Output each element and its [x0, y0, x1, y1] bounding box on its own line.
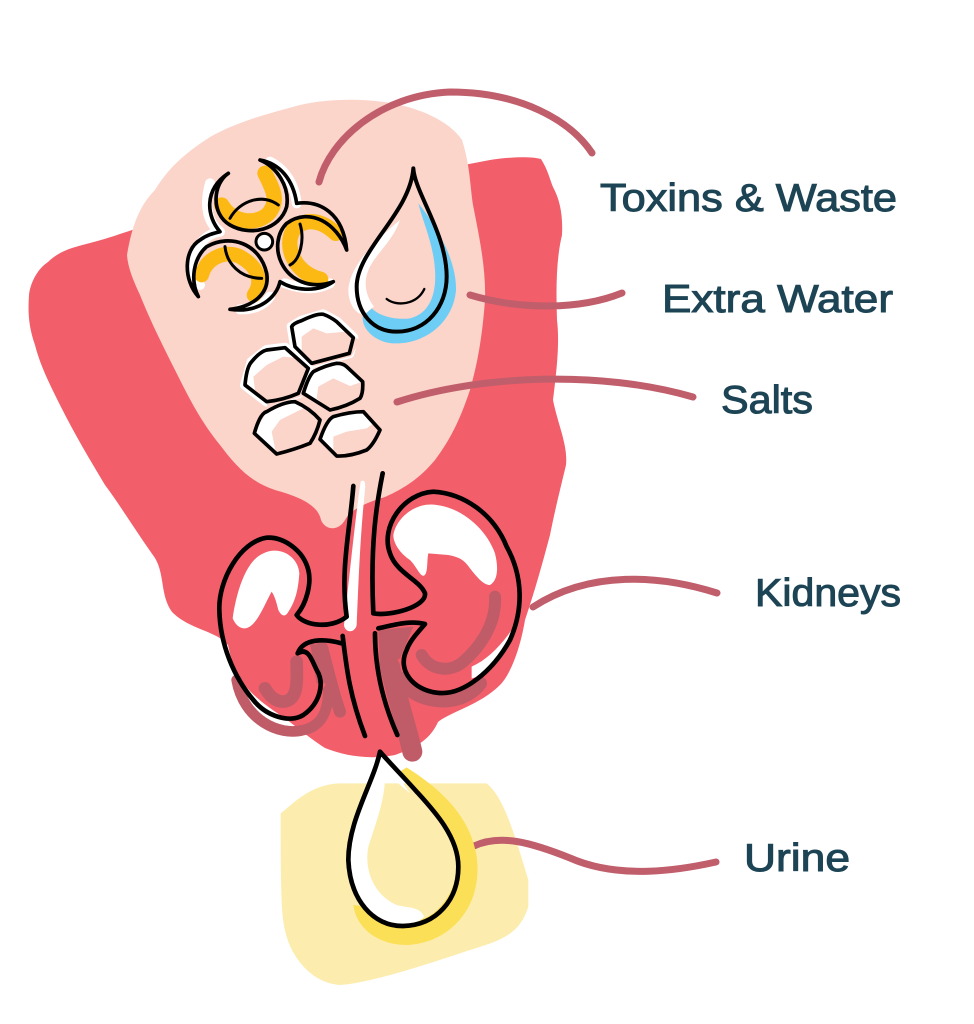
connector line: kidneys	[533, 579, 717, 607]
label: extra water: Extra Water	[662, 278, 893, 321]
peach stomach-like area	[127, 100, 485, 528]
icon: water drop	[348, 168, 456, 343]
label: urine: Urine	[744, 837, 850, 880]
red background blob	[29, 157, 566, 757]
icon: salt crystals	[245, 314, 380, 456]
urine pale yellow patch	[281, 783, 528, 985]
label: toxins and waste: Toxins & Waste	[600, 177, 897, 220]
connector line: toxins and waste	[319, 92, 592, 182]
label: kidneys: Kidneys	[755, 572, 901, 615]
label: salts: Salts	[721, 379, 813, 422]
icon: biohazard symbol	[187, 160, 347, 310]
icon: urine drop	[348, 752, 478, 945]
connector line: urine	[474, 840, 716, 871]
connector line: extra water	[470, 293, 622, 306]
connector line: salts	[397, 379, 693, 402]
icon: kidneys and ureters	[219, 473, 520, 752]
